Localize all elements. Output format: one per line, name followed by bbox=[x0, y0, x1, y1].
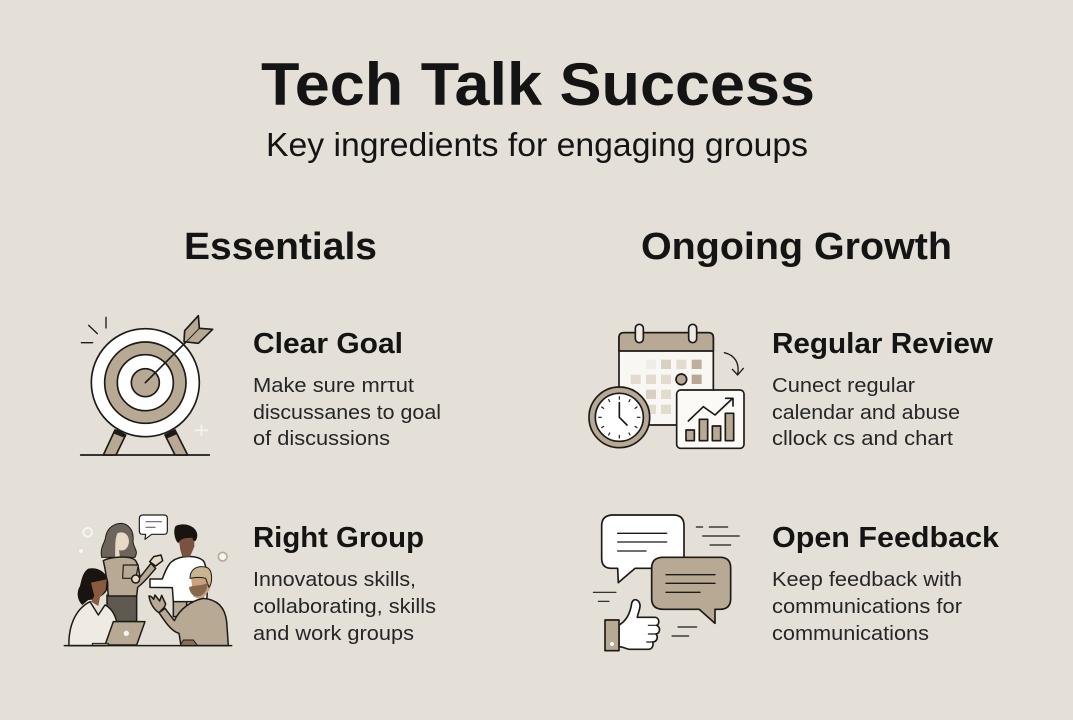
text: Right Group description: collaborating, skills bbox=[253, 596, 436, 618]
text: Clear Goal description bbox=[253, 375, 441, 450]
text: Open Feedback description: Keep feedback with bbox=[772, 569, 962, 591]
standing man bbox=[173, 600, 187, 617]
icon: target with arrow bbox=[81, 316, 213, 455]
icon: calendar, clock and chart bbox=[589, 324, 744, 448]
front woman bbox=[78, 568, 109, 605]
heading: Essentials: Essentials bbox=[184, 226, 377, 268]
speech bubble bbox=[139, 515, 167, 539]
icon: speech bubbles and thumbs up bbox=[593, 515, 739, 651]
title: Tech Talk Success bbox=[261, 51, 815, 118]
laptop bbox=[105, 622, 145, 645]
text: Right Group description bbox=[253, 569, 436, 645]
text: Clear Goal description: Make sure mrτut bbox=[253, 375, 414, 397]
text: Open Feedback description: communications for bbox=[772, 596, 962, 618]
text: Right Group description: and work groups bbox=[253, 623, 414, 645]
heading: Open Feedback: Open Feedback bbox=[772, 522, 1000, 554]
text: Regular Review description: cllock cs and chart bbox=[772, 428, 953, 450]
heading: Ongoing Growth: Ongoing Growth bbox=[641, 226, 952, 268]
text: Open Feedback description bbox=[772, 569, 962, 645]
decorative dots bbox=[83, 528, 92, 537]
back woman bbox=[101, 523, 136, 557]
text: Regular Review description: Cunect regular bbox=[772, 375, 915, 397]
panel: Open Feedback bbox=[593, 515, 1000, 651]
text: Open Feedback description: communications bbox=[772, 623, 929, 645]
heading: Regular Review: Regular Review bbox=[772, 328, 993, 360]
text: Regular Review description bbox=[772, 375, 960, 450]
panel: Right Group bbox=[64, 515, 436, 646]
heading: Clear Goal: Clear Goal bbox=[253, 328, 403, 360]
text: Clear Goal description: of discussions bbox=[253, 428, 390, 450]
text: Regular Review description: calendar and abuse bbox=[772, 402, 960, 424]
subtitle: Key ingredients for engaging groups bbox=[266, 126, 808, 163]
heading: Right Group: Right Group bbox=[253, 522, 424, 554]
text: Clear Goal description: discussanes to goal bbox=[253, 402, 441, 424]
text: Right Group description: Innovatous skills, bbox=[253, 569, 416, 591]
panel: Regular Review bbox=[589, 324, 993, 450]
panel: Clear Goal bbox=[81, 316, 441, 455]
front man bbox=[191, 577, 211, 600]
icon: team of four people bbox=[64, 515, 232, 646]
